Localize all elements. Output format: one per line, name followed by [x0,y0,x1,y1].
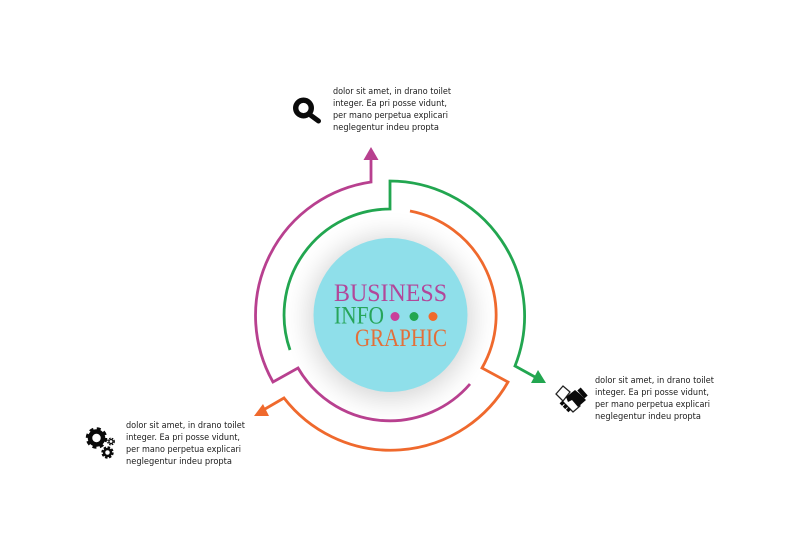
text block: right: per mano perpetua explicari [595,400,710,410]
text block: left [126,421,245,467]
central circle with shadow [308,236,472,400]
text block: left: dolor sit amet, in drano toilet [126,421,245,431]
text block: top [333,87,451,133]
text block: top: dolor sit amet, in drano toilet [333,87,451,97]
center title: GRAPHIC [355,325,447,352]
purple arrow path [256,147,470,421]
text block: top: neglegentur indeu propta [333,123,439,133]
text block: right: integer. Ea pri posse vidunt, [595,388,709,398]
icon: gears [87,428,114,458]
icon: handshake [556,386,586,412]
text block: right: dolor sit amet, in drano toilet [595,376,714,386]
center title: BUSINESS [334,280,447,307]
text block: right [595,376,714,422]
text block: top: integer. Ea pri posse vidunt, [333,99,447,109]
text block: left: per mano perpetua explicari [126,445,241,455]
center title [334,280,447,352]
center title: INFO [334,302,384,330]
green arrow path [284,181,546,383]
text block: left: integer. Ea pri posse vidunt, [126,433,240,443]
orange arrow path [254,211,508,450]
text block: top: per mano perpetua explicari [333,111,448,121]
icon: magnifying glass [296,100,318,121]
three colored dots [390,312,438,321]
text block: left: neglegentur indeu propta [126,457,232,467]
text block: right: neglegentur indeu propta [595,412,701,422]
